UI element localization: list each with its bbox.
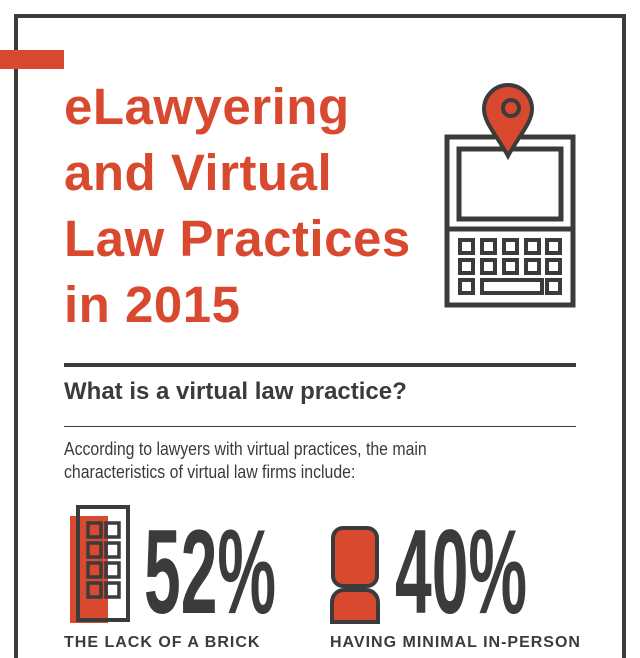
number 52%: 52% — [144, 505, 276, 639]
icon: building — [70, 505, 130, 623]
caption: lack of a brick: THE LACK OF A BRICK — [64, 634, 260, 651]
intro text: characteristics of virtual law firms include: — [64, 462, 355, 482]
title: Law Practices — [64, 210, 411, 267]
title — [64, 78, 411, 333]
red accent bar — [0, 50, 64, 69]
intro text — [64, 439, 427, 482]
caption: having minimal in-person: HAVING MINIMAL IN-PERSON — [330, 634, 581, 651]
icon: person — [330, 526, 380, 624]
stat: 52% — [70, 505, 276, 639]
title: in 2015 — [64, 276, 240, 333]
icon: tablet with location pin — [444, 83, 576, 308]
title: and Virtual — [64, 144, 332, 201]
stat: 40% — [330, 505, 527, 639]
divider thick — [64, 363, 576, 367]
title: eLawyering — [64, 78, 350, 135]
number 40%: 40% — [395, 505, 527, 639]
heading: what is a virtual law practice: What is a virtual law practice? — [64, 378, 407, 405]
intro text: According to lawyers with virtual practices, the main — [64, 439, 427, 459]
